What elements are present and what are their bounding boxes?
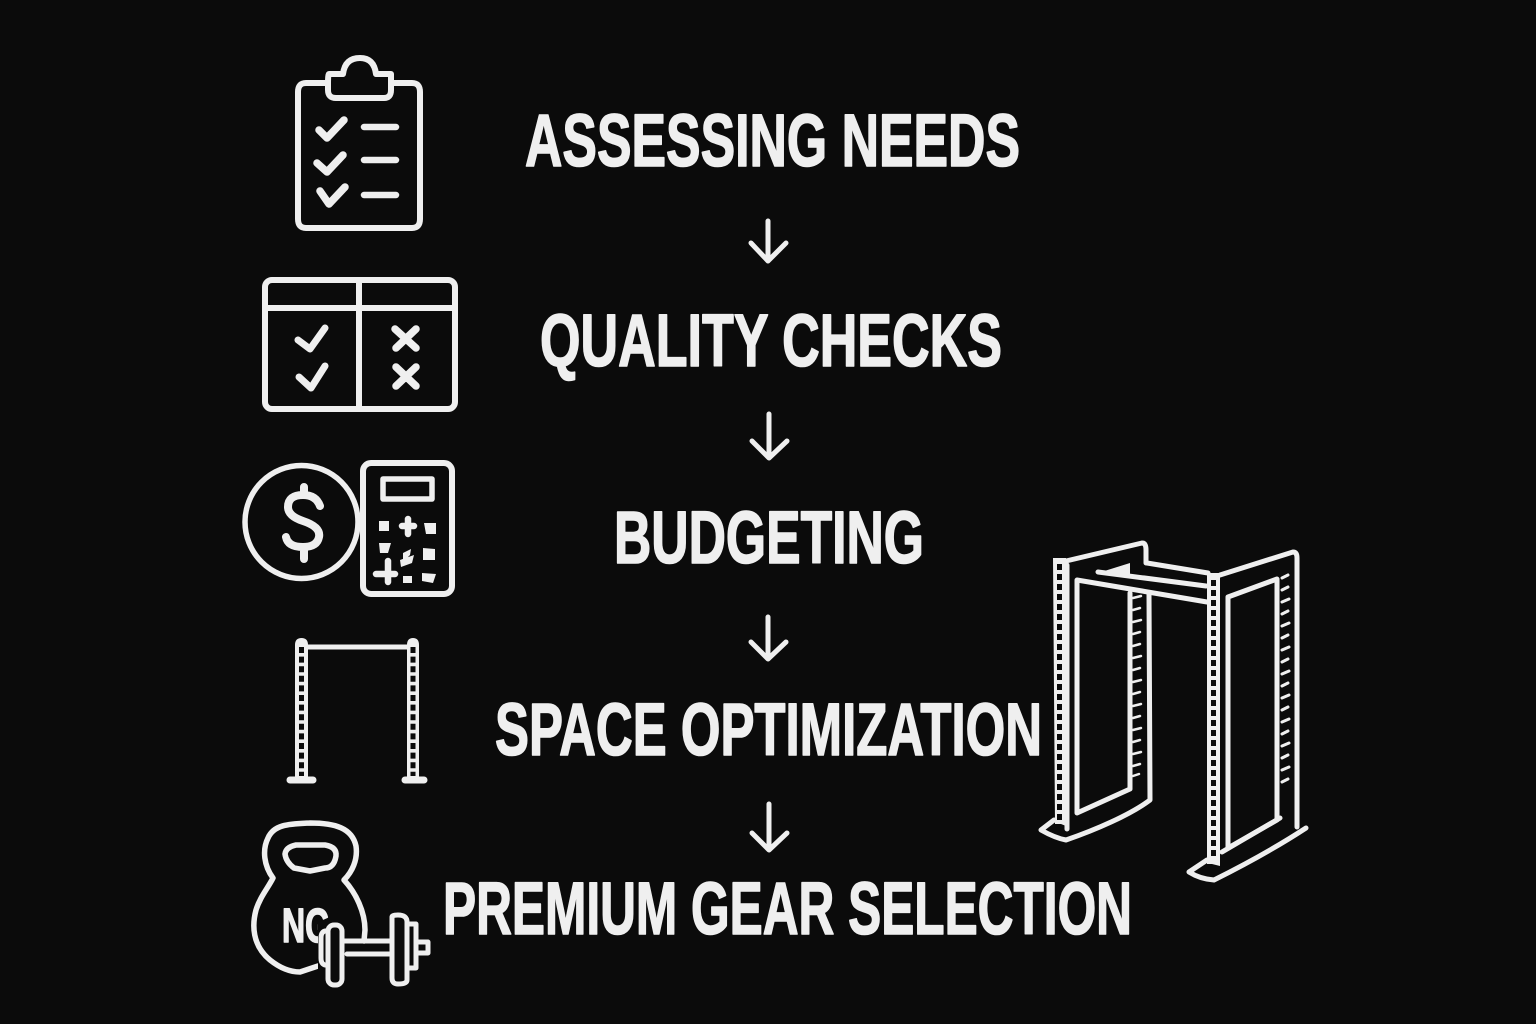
heading: premium gear selection: PREMIUM GEAR SELECTION xyxy=(443,867,1132,950)
heading: assessing needs: ASSESSING NEEDS xyxy=(525,99,1020,182)
icon: kettlebell and dumbbell xyxy=(254,823,428,985)
heading: space optimization: SPACE OPTIMIZATION xyxy=(495,688,1042,771)
top cross bars xyxy=(1077,563,1208,602)
heading: budgeting: BUDGETING xyxy=(614,496,924,579)
arrow 2 xyxy=(752,414,787,458)
right upright xyxy=(1189,552,1306,880)
left upright xyxy=(1041,543,1150,840)
icon: clipboard checklist xyxy=(298,58,420,228)
icon: pull-up rack xyxy=(290,638,424,780)
arrow 4 xyxy=(752,804,787,850)
icon: comparison table xyxy=(265,280,455,409)
illustration: power rack xyxy=(1041,543,1306,880)
arrow 1 xyxy=(751,221,786,261)
arrow 3 xyxy=(751,617,786,659)
icon: dollar coin and calculator xyxy=(245,463,452,594)
icon: kettlebell and dumbbell: NG xyxy=(282,900,330,953)
heading: quality checks: QUALITY CHECKS xyxy=(540,299,1002,382)
